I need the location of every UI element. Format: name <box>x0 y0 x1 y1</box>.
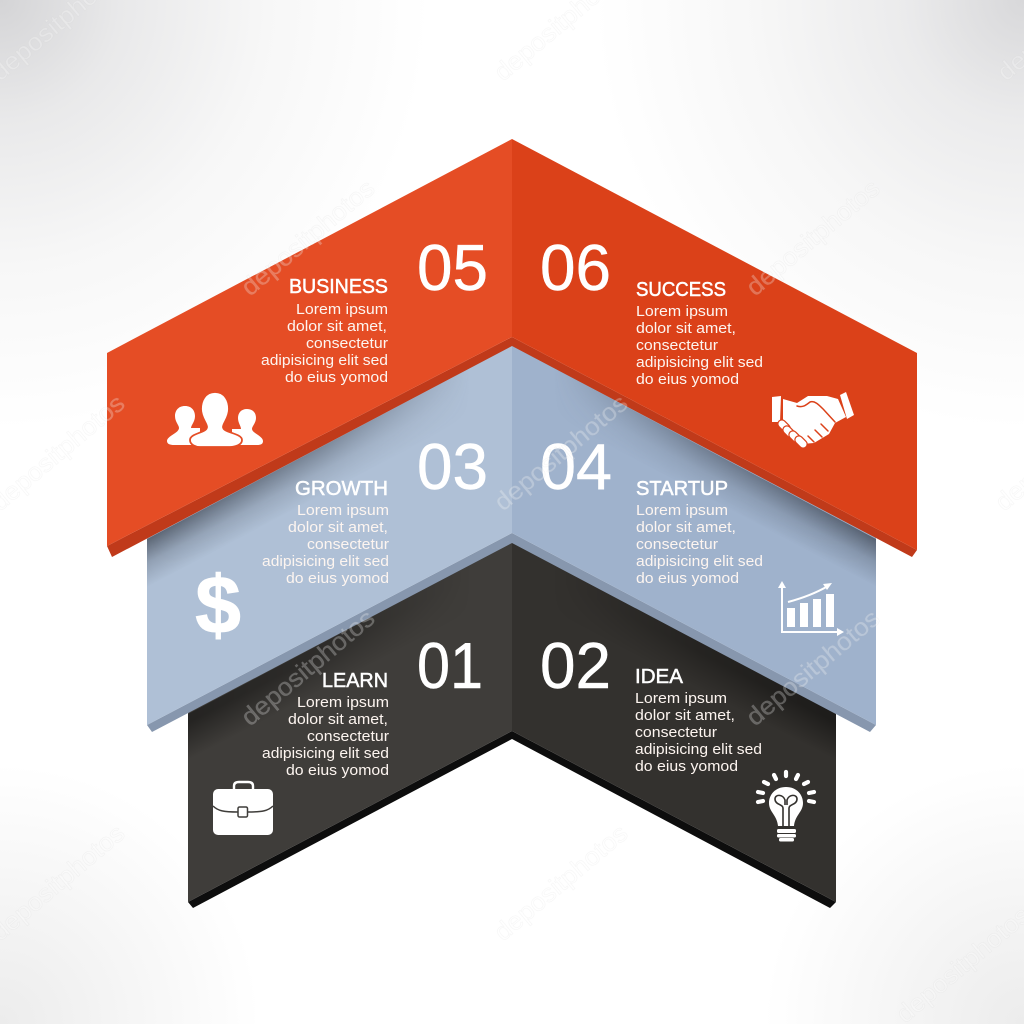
step 06 text: success <box>636 279 763 388</box>
step 06 text: success: Lorem ipsum <box>636 303 728 320</box>
step 01 text: learn: dolor sit amet, <box>288 711 388 728</box>
step 05 text: business: do eius yomod <box>285 369 388 386</box>
icon: light bulb <box>758 772 814 842</box>
step 04 text: startup: dolor sit amet, <box>636 519 736 536</box>
watermark text: depositphotos <box>741 604 885 732</box>
red arrow tier: steps 05 and 06 <box>107 139 917 557</box>
step 03 text: growth <box>262 478 389 587</box>
step 04 text: startup: do eius yomod <box>636 570 739 587</box>
step 06 text: success: SUCCESS <box>636 279 726 301</box>
step 05 text: business: adipisicing elit sed <box>261 352 388 369</box>
step 01 text: learn: do eius yomod <box>286 762 389 779</box>
watermark text: depositphotos <box>236 604 380 732</box>
step 02 text: idea: do eius yomod <box>635 758 738 775</box>
step 03 text: growth: GROWTH <box>295 478 388 500</box>
step 05 text: business: BUSINESS <box>289 276 388 298</box>
icon: dollar sign: $ <box>195 560 241 651</box>
step 01 text: learn: LEARN <box>322 670 388 692</box>
blue arrow tier: steps 03 and 04 <box>147 340 876 732</box>
step 03 text: growth: Lorem ipsum <box>297 502 389 519</box>
step 01 text: learn: adipisicing elit sed <box>262 745 389 762</box>
step 02 text: idea: dolor sit amet, <box>635 707 735 724</box>
step 02 number: 02 <box>540 629 611 702</box>
step 02 text: idea: IDEA <box>635 666 684 688</box>
step 06 text: success: do eius yomod <box>636 371 739 388</box>
step 05 text: business: consectetur <box>306 335 388 352</box>
step 05 text: business: dolor sit amet, <box>287 318 387 335</box>
step 02 text: idea: Lorem ipsum <box>635 690 727 707</box>
step 04 text: startup: adipisicing elit sed <box>636 553 763 570</box>
step 05 text: business: Lorem ipsum <box>296 301 388 318</box>
step 04 number: 04 <box>540 430 612 503</box>
step 03 text: growth: adipisicing elit sed <box>262 553 389 570</box>
step 04 text: startup: STARTUP <box>636 478 728 500</box>
step 04 text: startup: consectetur <box>636 536 718 553</box>
watermark text: depositphotos <box>236 174 380 302</box>
step 03 number: 03 <box>417 430 488 503</box>
step 05 number: 05 <box>417 231 488 304</box>
step 01 text: learn <box>262 670 389 779</box>
step 06 number: 06 <box>540 231 611 304</box>
step 01 text: learn: Lorem ipsum <box>297 694 389 711</box>
watermark text: depositphotos <box>741 174 885 302</box>
step 06 text: success: dolor sit amet, <box>636 320 736 337</box>
step 03 text: growth: dolor sit amet, <box>288 519 388 536</box>
watermark text: depositphotos <box>489 819 633 947</box>
step 01 number: 01 <box>417 629 483 702</box>
watermark text: depositphotos <box>489 389 633 517</box>
step 01 text: learn: consectetur <box>307 728 389 745</box>
step 06 text: success: consectetur <box>636 337 718 354</box>
icon: people group <box>167 392 263 447</box>
icon: bar chart with rising arrow <box>778 581 844 636</box>
step 03 text: growth: consectetur <box>307 536 389 553</box>
dark arrow tier: steps 01 and 02 <box>188 535 836 908</box>
step 06 text: success: adipisicing elit sed <box>636 354 763 371</box>
step 03 text: growth: do eius yomod <box>286 570 389 587</box>
step 02 text: idea: adipisicing elit sed <box>635 741 762 758</box>
step 04 text: startup: Lorem ipsum <box>636 502 728 519</box>
step 05 text: business <box>261 276 388 386</box>
step 02 text: idea: consectetur <box>635 724 717 741</box>
step 02 text: idea <box>635 666 762 775</box>
step 04 text: startup <box>636 478 763 587</box>
icon: briefcase <box>213 782 273 835</box>
icon: handshake <box>772 392 854 450</box>
